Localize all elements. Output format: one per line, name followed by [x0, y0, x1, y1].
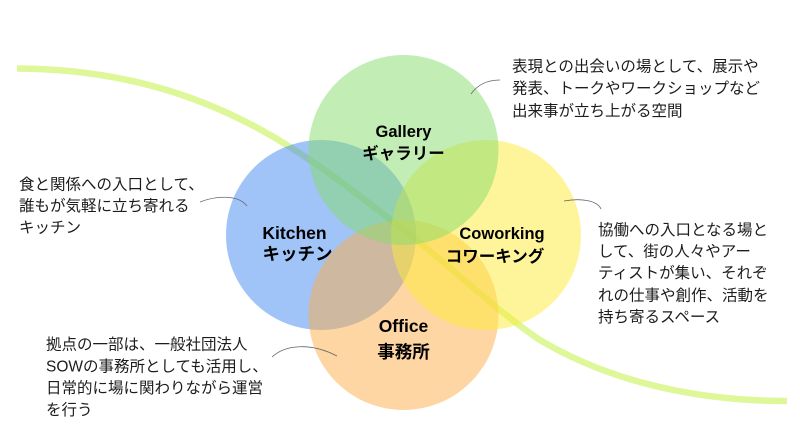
connector: gallery — [471, 80, 500, 94]
heading: office — [377, 316, 430, 362]
text block: gallery description: 表現との出会いの場として、展示や — [512, 58, 759, 76]
text block: gallery description: 出来事が立ち上がる空間 — [512, 102, 683, 120]
heading: kitchen — [262, 223, 332, 264]
heading: office: Office — [379, 316, 429, 336]
connector: coworking — [564, 200, 601, 209]
green ribbon curve — [17, 68, 787, 401]
heading: gallery — [362, 123, 445, 163]
circle: kitchen — [226, 140, 416, 330]
text block: kitchen description: 食と関係への入口として、 — [19, 176, 204, 194]
circle: office — [308, 220, 498, 410]
text block: office description: を行う — [46, 401, 93, 419]
text block: gallery description — [512, 58, 761, 120]
text block: coworking description: 協働への入口となる場と — [598, 221, 768, 239]
heading: gallery: ギャラリー — [362, 144, 445, 163]
text block: kitchen description — [19, 176, 204, 236]
text block: gallery description: 発表、トークやワークショップなど — [512, 80, 761, 98]
heading: office: 事務所 — [377, 342, 430, 362]
text block: coworking description: 持ち寄るスペース — [598, 308, 720, 326]
text block: coworking description: れの仕事や創作、活動を — [598, 286, 769, 304]
text block: office description: 拠点の一部は、一般社団法人 — [46, 336, 248, 354]
heading: coworking: コワーキング — [446, 246, 545, 266]
heading: gallery: Gallery — [376, 123, 432, 141]
heading: coworking: Coworking — [459, 225, 545, 243]
connector: kitchen — [200, 197, 247, 206]
text block: kitchen description: キッチン — [19, 220, 81, 236]
circle: gallery — [308, 55, 498, 245]
heading: coworking — [446, 225, 545, 266]
connector: office — [272, 347, 337, 357]
text block: coworking description — [598, 221, 769, 326]
text block: office description — [46, 336, 268, 419]
text block: office description: SOWの事務所としても活用し、 — [46, 358, 268, 376]
circle: coworking — [391, 140, 581, 330]
heading: kitchen: Kitchen — [262, 223, 327, 243]
text block: kitchen description: 誰もが気軽に立ち寄れる — [19, 197, 190, 215]
heading: kitchen: キッチン — [262, 244, 332, 264]
text block: coworking description: して、街の人々やアー — [598, 242, 751, 260]
text block: office description: 日常的に場に関わりながら運営 — [46, 379, 263, 397]
text block: coworking description: ティストが集い、それぞ — [598, 264, 768, 282]
